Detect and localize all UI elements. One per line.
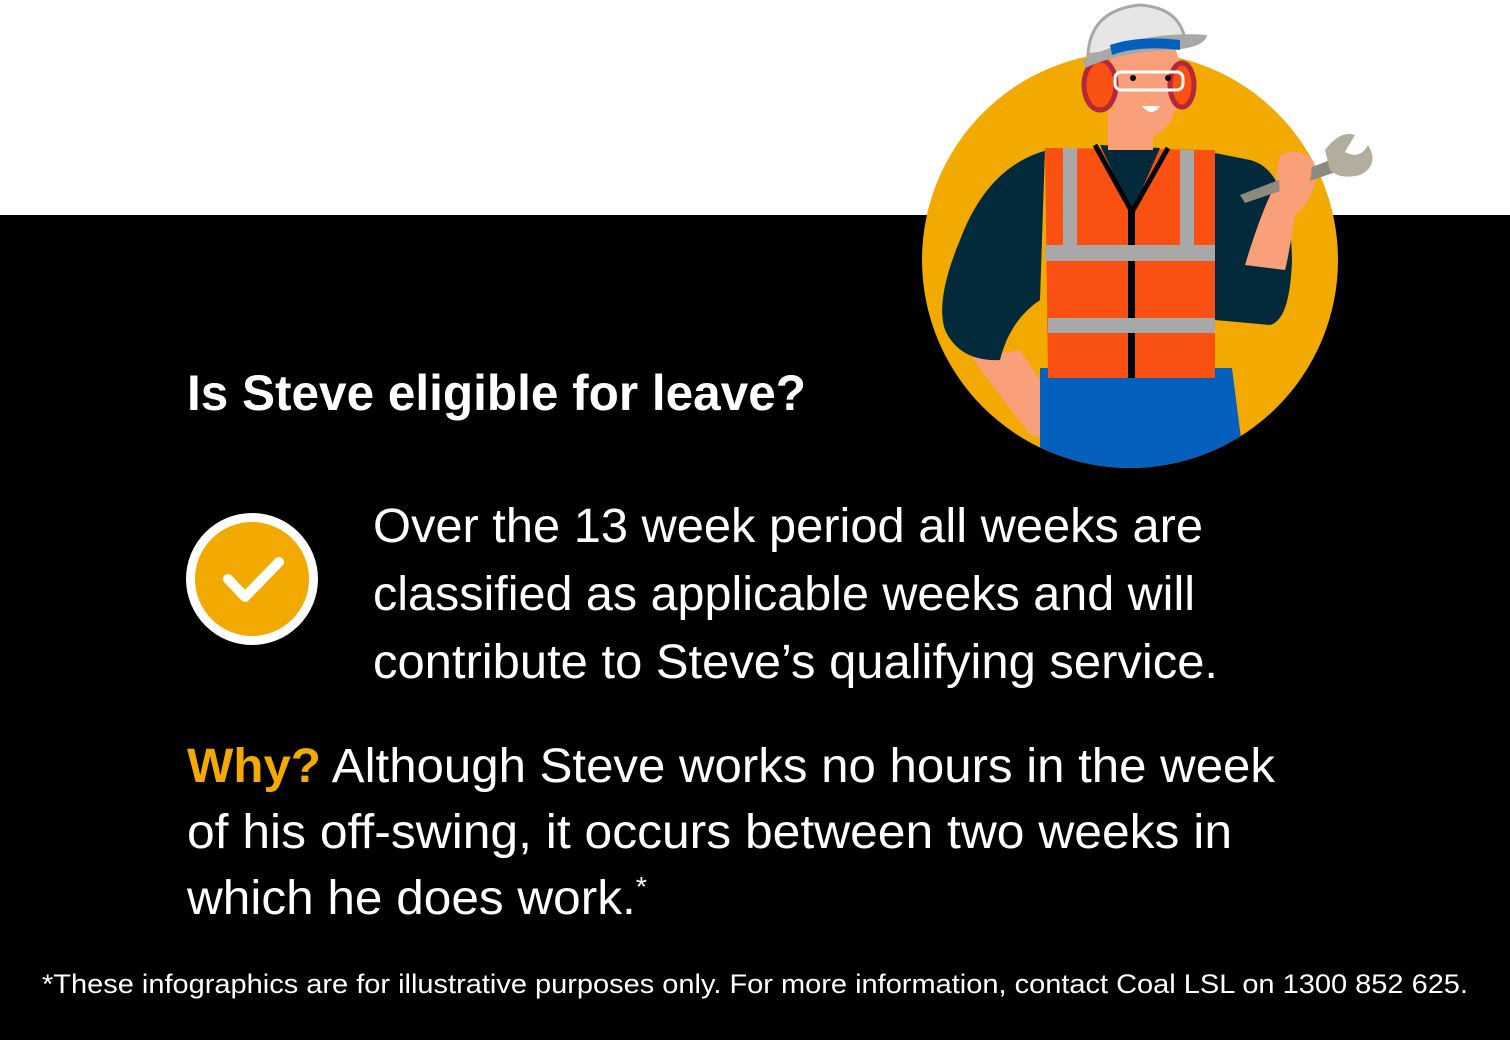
illustration: worker in circle	[922, 5, 1372, 470]
text block: result: contribute to Steve’s qualifying service.	[373, 636, 1218, 689]
black background panel	[0, 215, 1510, 1040]
footer disclaimer: *These infographics are for illustrative purposes only. For more information, contact Coal LSL on 1300 852 625.	[42, 969, 1468, 999]
text block: why explanation: *	[636, 871, 647, 902]
text block: result: classified as applicable weeks and will	[373, 568, 1195, 621]
text block: result	[373, 500, 1218, 689]
title: Is Steve eligible for leave?	[187, 365, 806, 421]
text block: why explanation	[186, 740, 1276, 925]
text block: why explanation: which he does work.	[187, 872, 622, 925]
text block: result: Over the 13 week period all weeks are	[373, 500, 1203, 553]
icon: check circle	[186, 513, 318, 645]
text block: why explanation: of his off-swing, it occurs between two weeks in	[187, 806, 1232, 859]
text block: why explanation: Why? Although Steve works no hours in the week	[187, 740, 1276, 793]
